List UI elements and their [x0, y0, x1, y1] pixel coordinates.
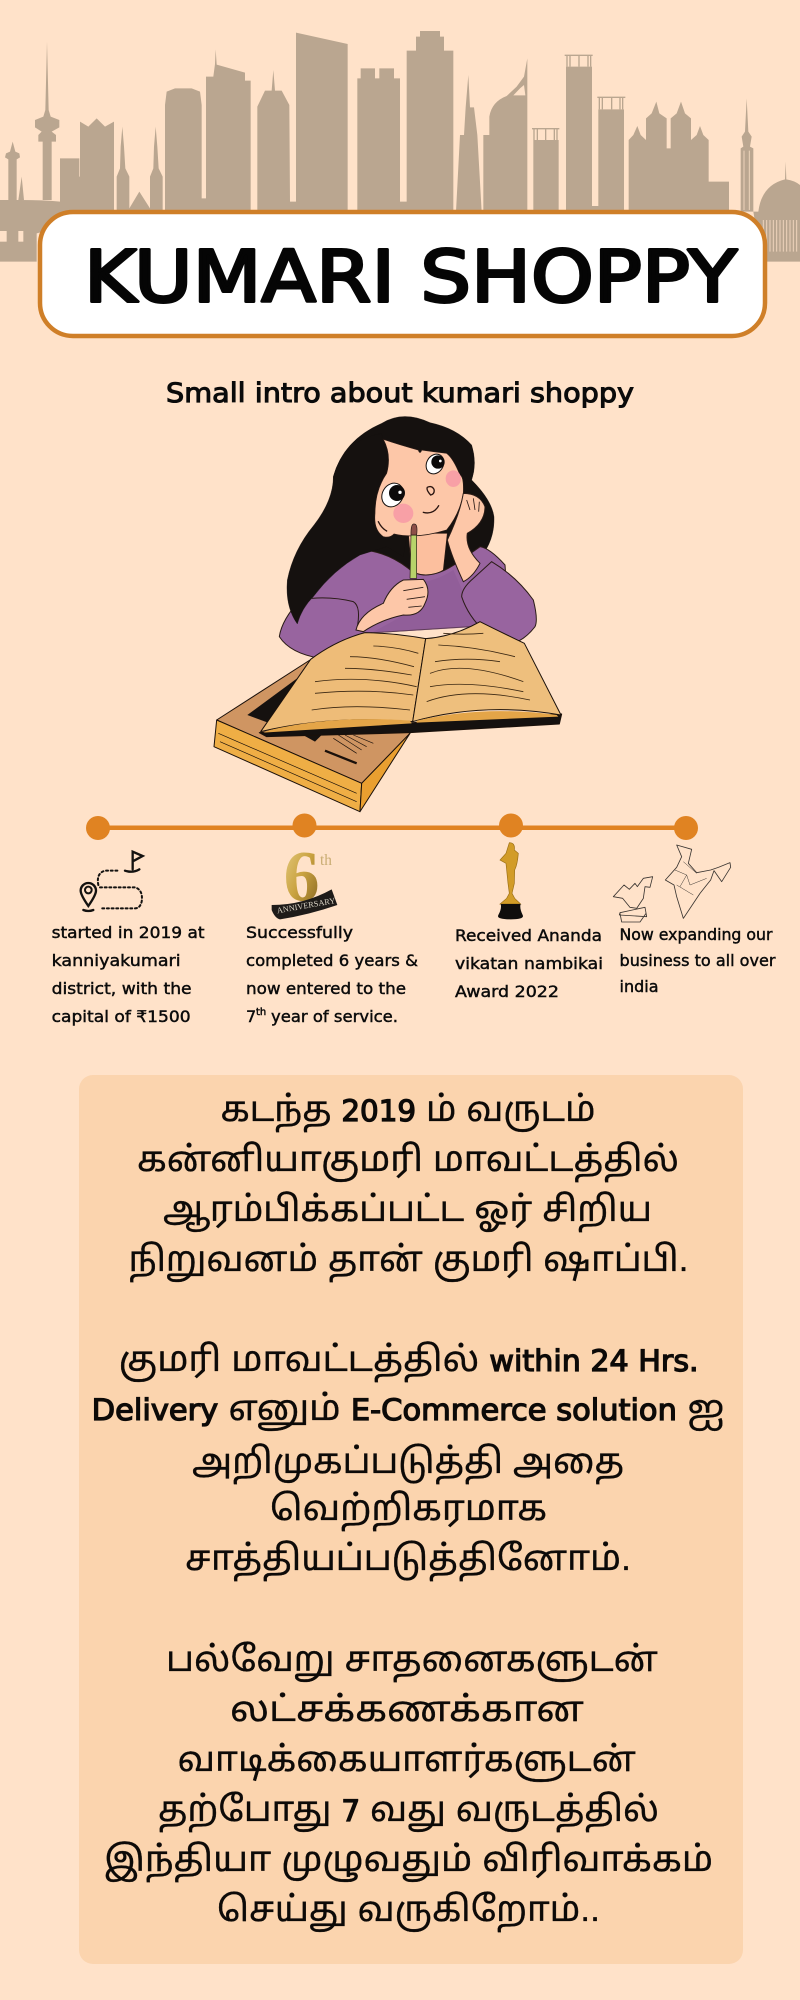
paragraph 3: [104, 1640, 713, 1932]
open book: [259, 622, 562, 737]
icon: 6th anniversary badge: [272, 837, 337, 919]
milestone 3 text: Received Ananda: [455, 926, 602, 945]
neck: [408, 533, 447, 575]
paragraph 3: செய்து வருகிறோம்..: [217, 1890, 600, 1932]
face: [375, 439, 463, 537]
stacked closed book: [214, 660, 410, 812]
milestone 3 text: vikatan nambikai: [455, 954, 603, 973]
milestone 1 text: kanniyakumari: [52, 951, 181, 970]
city skyline illustration: [0, 31, 800, 262]
paragraph 2: வெற்றிகரமாக: [270, 1489, 547, 1531]
milestone 2 text: now entered to the: [246, 979, 406, 998]
panel: about the company in Tamil: [79, 1075, 743, 1964]
hair back: [333, 416, 494, 573]
paragraph 1: ஆரம்பிக்கப்பட்ட ஓர் சிறிய: [163, 1190, 652, 1233]
milestone 4 text: [620, 925, 776, 996]
milestone 2 text: th: [256, 1007, 266, 1018]
paragraph 3: வாடிக்கையாளர்களுடன்: [178, 1740, 636, 1782]
left eye: [378, 479, 408, 511]
paragraph 1: கன்னியாகுமரி மாவட்டத்தில்: [137, 1140, 679, 1182]
paragraph 1: [128, 1090, 688, 1282]
left cheek: [393, 504, 413, 523]
milestone 1 text: started in 2019 at: [52, 923, 205, 942]
timeline nodes: [86, 814, 698, 840]
title banner: [40, 212, 765, 336]
subtitle: Small intro about kumari shoppy: [166, 378, 634, 409]
milestone 2 text: 7: [246, 1007, 256, 1026]
milestone 2 text: Successfully: [246, 923, 353, 942]
milestone 1 text: district, with the: [52, 979, 192, 998]
paragraph 3: பல்வேறு சாதனைகளுடன்: [166, 1640, 658, 1682]
icon: 6th anniversary badge: ANNIVERSARY: [276, 896, 336, 915]
pencil: [410, 524, 417, 578]
milestone 2 text: completed 6 years &: [246, 951, 418, 970]
paragraph 2: Delivery எனும் E-Commerce solution ஐ: [92, 1389, 725, 1432]
paragraph 2: சாத்தியப்படுத்தினோம்.: [185, 1539, 631, 1581]
paragraph 2: [92, 1340, 725, 1581]
milestone 1 text: [52, 923, 205, 1026]
illustration: girl reading with books: [214, 416, 562, 812]
paragraph 2: அறிமுகப்படுத்தி அதை: [192, 1442, 624, 1484]
icon: route from pin to flag: [81, 852, 143, 911]
hand holding pencil: [356, 579, 428, 632]
paragraph 3: தற்போது 7 வது வருடத்தில்: [158, 1790, 659, 1832]
hair front lock over shoulder: [287, 433, 407, 624]
icon: 6th anniversary badge: th: [320, 852, 332, 869]
right cheek: [446, 470, 461, 487]
milestone 1 text: capital of ₹1500: [52, 1007, 191, 1026]
milestone 3 text: [455, 926, 603, 1001]
right sleeve: [462, 562, 536, 644]
icon: growth arrow box and map of India: [613, 845, 731, 922]
milestone 4 text: Now expanding our: [620, 925, 773, 944]
icon: award trophy: [498, 843, 523, 919]
paragraph 3: லட்சக்கணக்கான: [230, 1690, 584, 1729]
nose, mouth, ear: [378, 487, 439, 531]
icon: 6th anniversary badge: 6: [284, 837, 319, 917]
timeline track: [86, 814, 698, 840]
paragraph 1: கடந்த 2019 ம் வருடம்: [220, 1090, 596, 1132]
milestone 2 text: [246, 923, 418, 1026]
milestone 4 text: business to all over: [620, 951, 776, 970]
milestone 4 text: india: [620, 977, 658, 996]
paragraph 1: நிறுவனம் தான் குமரி ஷாப்பி.: [128, 1240, 688, 1282]
paragraph 3: இந்தியா முழுவதும் விரிவாக்கம்: [104, 1840, 713, 1882]
paragraph 2: குமரி மாவட்டத்தில் within 24 Hrs.: [119, 1340, 699, 1382]
milestone 2 text: year of service.: [271, 1007, 398, 1026]
sweater: [279, 547, 510, 658]
hand on cheek: [447, 493, 485, 582]
milestone 3 text: Award 2022: [455, 982, 559, 1001]
right eye: [423, 451, 447, 477]
title text: KUMARI SHOPPY: [84, 236, 738, 318]
